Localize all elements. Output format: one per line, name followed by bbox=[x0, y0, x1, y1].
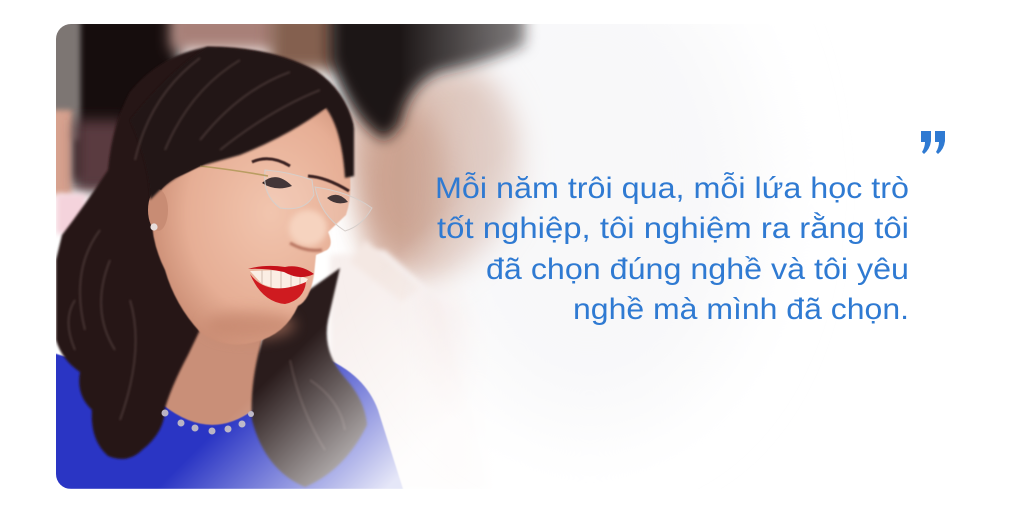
nostril shade bbox=[290, 243, 322, 250]
glasses bbox=[265, 170, 372, 231]
quote text bbox=[435, 172, 909, 326]
hair back full silhouette bbox=[56, 47, 353, 459]
quote text: nghề mà mình đã chọn. bbox=[573, 293, 909, 326]
pearl necklace bbox=[162, 410, 254, 434]
quote text: đã chọn đúng nghề và tôi yêu bbox=[486, 253, 909, 286]
mouth bbox=[250, 270, 308, 288]
pale grey wash behind quote bbox=[420, 0, 760, 430]
glasses arm bbox=[200, 166, 268, 176]
background fade to white bbox=[410, 24, 535, 267]
cheek shading bbox=[205, 311, 295, 339]
hair crown and bangs bbox=[130, 47, 354, 200]
ear and pearl earring bbox=[148, 189, 168, 231]
quote text: Mỗi năm trôi qua, mỗi lứa học trò bbox=[435, 172, 909, 205]
icon: closing quotation mark bbox=[921, 131, 945, 154]
hair right side bbox=[252, 268, 367, 487]
nose highlight bbox=[289, 210, 327, 246]
face bbox=[152, 105, 350, 344]
quote text: tốt nghiệp, tôi nghiệm ra rằng tôi bbox=[437, 212, 909, 245]
blurred background: audience and man behind bbox=[56, 24, 536, 410]
eyes and brows bbox=[252, 159, 290, 166]
neck bbox=[163, 325, 262, 425]
infographic canvas bbox=[56, 24, 945, 489]
photo panel: woman smiling, blurred background fading to white bbox=[56, 24, 546, 489]
lower right fade over dress and hair bbox=[168, 203, 504, 489]
blue dress bbox=[50, 352, 403, 489]
woman bbox=[50, 47, 403, 489]
